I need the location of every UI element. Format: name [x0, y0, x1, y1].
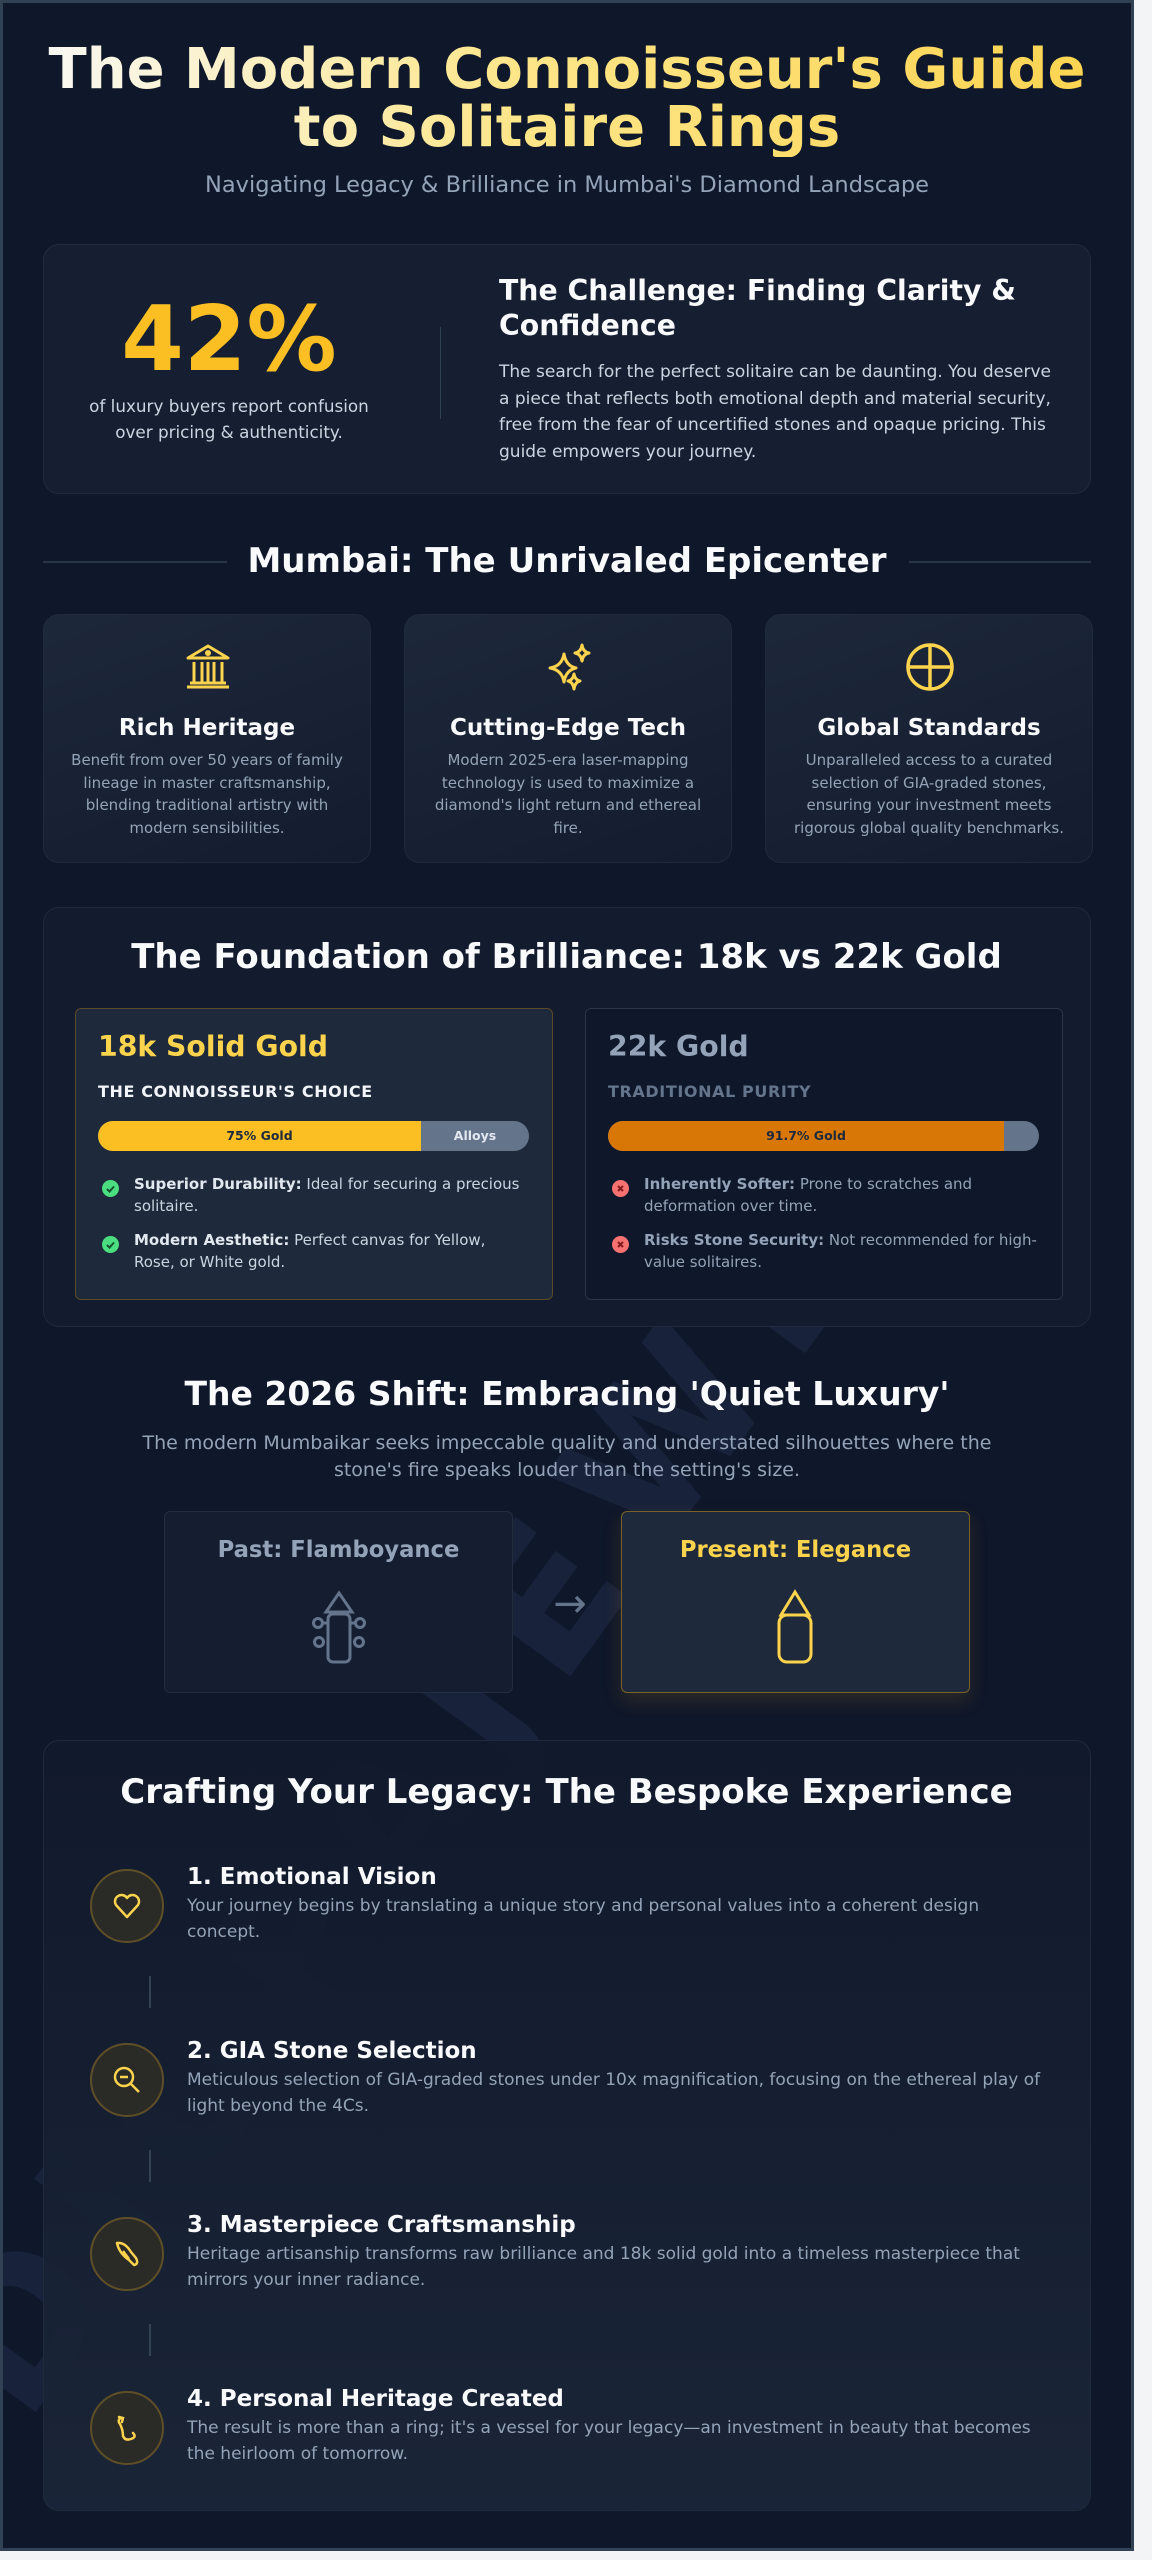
- panel: global standards: [765, 614, 1093, 863]
- step 1: 1. Emotional Vision: [187, 1864, 437, 1890]
- title: to Solitaire Rings: [294, 95, 840, 160]
- panel: global standards: Unparalleled access to a curated selection of GIA-graded stones, ensuring your investment meets rigorous global quality benchmarks.: [794, 751, 1064, 837]
- card: 22k: TRADITIONAL PURITY: [608, 1082, 811, 1101]
- card: 18k: [75, 1008, 553, 1300]
- bar: 75% gold: [98, 1121, 529, 1151]
- icon: landmark: [186, 644, 230, 688]
- panel: past: Past: Flamboyance: [218, 1537, 459, 1563]
- title: The Modern Connoisseur's Guide: [49, 37, 1085, 102]
- panel: rich heritage: Rich Heritage: [119, 715, 295, 741]
- bullet: security: Risks Stone Security: Not recommended for high-value solitaires.: [644, 1231, 1037, 1271]
- bullet: durability: Superior Durability: Ideal for securing a precious solitaire.: [134, 1175, 519, 1215]
- step 4: The result is more than a ring; it's a vessel for your legacy—an investment in beauty that becomes the heirloom of tomorrow.: [187, 2418, 1031, 2464]
- title: [3, 41, 1131, 157]
- panel: gold comparison: [43, 907, 1091, 1327]
- bar: 91.7% gold: [608, 1121, 1039, 1151]
- panel: cutting-edge tech: Cutting-Edge Tech: [450, 715, 686, 741]
- heading: 2026 shift: The 2026 Shift: Embracing 'Quiet Luxury': [185, 1374, 949, 1413]
- bar: 75% gold: Alloys: [454, 1128, 496, 1143]
- step 4: 4. Personal Heritage Created: [187, 2386, 564, 2412]
- step 3: 3. Masterpiece Craftsmanship: [187, 2212, 576, 2238]
- bullet: softer: Inherently Softer: Prone to scratches and deformation over time.: [644, 1175, 972, 1215]
- bar: 91.7% gold: 91.7% Gold: [766, 1128, 846, 1143]
- step 1: Your journey begins by translating a unique story and personal values into a coherent design concept.: [187, 1896, 979, 1942]
- challenge heading: The Challenge: Finding Clarity & Confidence: [499, 274, 1016, 342]
- step 2: Meticulous selection of GIA-graded stones under 10x magnification, focusing on the ethereal play of light beyond the 4Cs.: [187, 2070, 1040, 2116]
- step 2: [90, 2038, 1040, 2117]
- heading: Mumbai: Mumbai: The Unrivaled Epicenter: [247, 541, 887, 581]
- panel: challenge: [43, 244, 1091, 494]
- panel: present: Present: Elegance: [680, 1537, 911, 1563]
- step 1: [90, 1864, 979, 1943]
- arrow: →: [553, 1581, 587, 1627]
- step 2: 2. GIA Stone Selection: [187, 2038, 477, 2064]
- panel: rich heritage: Benefit from over 50 years of family lineage in master craftsmanship, blending traditional artistry with modern sensibilities.: [71, 751, 343, 837]
- heading: crafting: Crafting Your Legacy: The Bespoke Experience: [120, 1772, 1013, 1812]
- icon: ornate ring: [312, 1590, 366, 1664]
- step 3: [90, 2212, 1020, 2291]
- challenge text: The search for the perfect solitaire can be daunting. You deserve a piece that reflects both emotional depth and material security, free from the fear of uncertified stones and opaque pricing. This guide empowers your journey.: [499, 362, 1051, 462]
- panel: cutting-edge tech: [404, 614, 732, 863]
- card: 18k: 18k Solid Gold: [98, 1030, 328, 1063]
- card: 22k: 22k Gold: [608, 1030, 749, 1063]
- panel: rich heritage: [43, 614, 371, 863]
- card: 18k: THE CONNOISSEUR'S CHOICE: [98, 1082, 373, 1101]
- subtitle: Navigating Legacy & Brilliance in Mumbai's Diamond Landscape: [205, 172, 929, 198]
- panel: present: [621, 1511, 970, 1693]
- stat caption: of luxury buyers report confusion over pricing & authenticity.: [89, 396, 369, 442]
- panel: cutting-edge tech: Modern 2025-era laser-mapping technology is used to maximize a diamond's light return and ethereal fire.: [435, 751, 701, 837]
- panel: past: [164, 1511, 513, 1693]
- bullet: aesthetic: Modern Aesthetic: Perfect canvas for Yellow, Rose, or White gold.: [134, 1231, 485, 1271]
- shift description: The modern Mumbaikar seeks impeccable quality and understated silhouettes where the stone's fire speaks louder than the setting's size.: [143, 1432, 991, 1481]
- card: 22k: [585, 1008, 1063, 1300]
- icon: globe: [906, 643, 954, 691]
- step 4: [90, 2386, 1031, 2465]
- step 3: Heritage artisanship transforms raw brilliance and 18k solid gold into a timeless masterpiece that mirrors your inner radiance.: [187, 2244, 1020, 2290]
- bar: 75% gold: 75% Gold: [226, 1128, 293, 1143]
- panel: bespoke experience: [43, 1740, 1091, 2511]
- icon: solitaire: [778, 1589, 812, 1664]
- panel: global standards: Global Standards: [817, 715, 1041, 741]
- heading: foundation: The Foundation of Brilliance: 18k vs 22k Gold: [131, 937, 1002, 977]
- icon: sparkles: [548, 644, 590, 690]
- stat: 42%: 42%: [121, 287, 337, 392]
